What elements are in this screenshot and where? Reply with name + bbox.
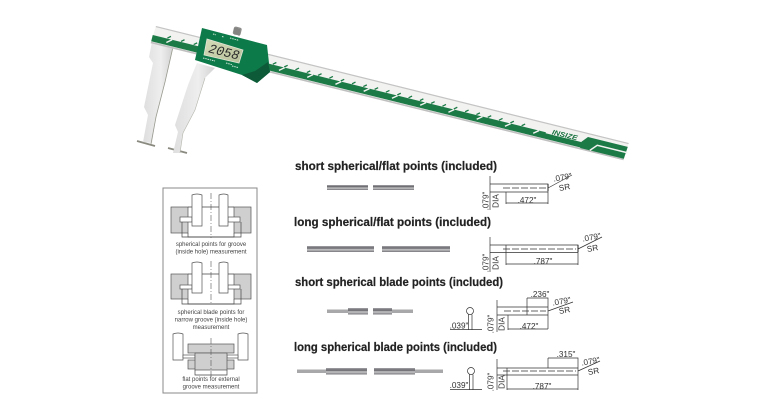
caliper product photo: [137, 26, 630, 161]
lcd screen: [204, 39, 243, 63]
dimension drawing: .472": [518, 196, 537, 205]
diagram: spherical points for groove: [171, 193, 251, 238]
points photo: [297, 368, 443, 374]
dimension drawing: SR: [587, 366, 600, 377]
section: short spherical blade points: [295, 277, 573, 333]
diagram: spherical blade points for narrow groove: [171, 261, 251, 305]
dimension drawing: [482, 171, 573, 210]
dimension drawing: .472": [520, 322, 539, 331]
dimension drawing: .079": [482, 253, 490, 272]
dimension drawing: DIA: [498, 375, 506, 389]
logo: INSIZE: [551, 129, 578, 142]
dimension drawing: [486, 350, 601, 391]
dimension drawing: .079": [552, 295, 572, 308]
heading: short spherical blade points (included): [295, 277, 503, 289]
points photo: [307, 246, 450, 252]
section: short spherical/flat points: [295, 161, 573, 210]
dimension drawing: .079": [553, 171, 573, 184]
right jaw: [168, 63, 215, 153]
head button labels: [203, 34, 239, 68]
left jaw: [137, 42, 173, 146]
heading: long spherical/flat points (included): [294, 217, 491, 229]
dimension drawing: .236": [531, 290, 550, 299]
dimension drawing: .079": [582, 231, 602, 244]
dimension drawing: SR: [586, 243, 599, 254]
white scale ticks: [166, 39, 539, 134]
panel: measurement application diagrams: [163, 188, 257, 393]
caption: flat points: groove measurement: [183, 384, 240, 390]
caption: spherical blade points: measurement: [193, 325, 230, 331]
diagram: flat points for external groove: [173, 333, 248, 377]
dimension drawing: DIA: [498, 317, 506, 331]
dimension drawing: SR: [558, 305, 571, 316]
section: long spherical blade points: [294, 342, 601, 391]
dimension drawing: .787": [534, 257, 553, 266]
digital display head: [195, 28, 270, 83]
lcd reading: 2058: [207, 41, 241, 64]
points photo: [327, 308, 413, 314]
dimension drawing: DIA: [492, 194, 500, 208]
dimension drawing: SR: [558, 182, 571, 193]
caption: spherical points for groove: spherical points for groove: [176, 242, 247, 248]
caption: flat points: flat points for external: [182, 377, 240, 383]
dimension drawing: .079": [486, 314, 496, 333]
section: long spherical/flat points: [294, 217, 602, 272]
dimension drawing: .315": [557, 350, 576, 359]
caption: spherical points for groove: (inside hole) measurement: [175, 250, 247, 256]
dimension drawing: .079": [482, 191, 490, 210]
caption: spherical blade points: narrow groove (inside hole): [175, 318, 247, 324]
dimension drawing: .787": [533, 382, 552, 391]
blade point end view: [450, 368, 482, 390]
blade point end view: .039": [450, 381, 469, 390]
thumb knob: [232, 26, 242, 36]
dimension drawing: DIA: [492, 256, 500, 270]
dimension drawing: .079": [581, 355, 601, 368]
dimension drawing: [486, 290, 573, 333]
blade point end view: [450, 308, 482, 330]
caption: spherical blade points: spherical blade points for: [178, 310, 244, 316]
heading: short spherical/flat points (included): [295, 161, 497, 173]
dimension drawing: [482, 231, 602, 272]
points photo: [327, 185, 414, 190]
dimension drawing: .079": [486, 372, 496, 391]
main beam with scale: [151, 26, 630, 161]
heading: long spherical blade points (included): [294, 342, 497, 354]
green scale ticks: [167, 36, 525, 126]
blade point end view: .039": [450, 322, 469, 330]
